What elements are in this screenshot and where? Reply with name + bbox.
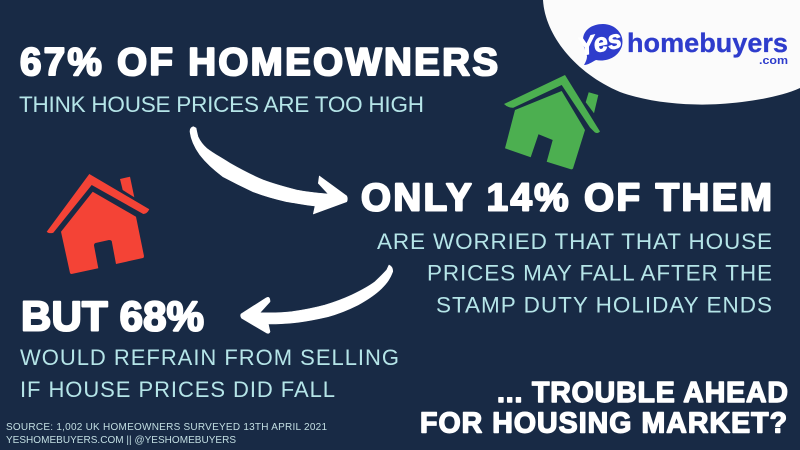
logo: yes homebuyers: Yes	[575, 23, 624, 62]
text: would refrain	[20, 345, 399, 402]
source note: YESHOMEBUYERS.COM || @YESHOMEBUYERS	[6, 435, 236, 446]
logo: yes homebuyers: homebuyers	[627, 28, 788, 58]
arrow: to 68%	[241, 265, 393, 333]
logo: yes homebuyers: .com	[759, 55, 788, 67]
heading: but 68%: BUT 68%	[21, 292, 204, 340]
icon: green house	[504, 75, 600, 169]
callout: trouble ahead	[420, 377, 788, 440]
callout: trouble ahead: ... TROUBLE AHEAD	[497, 377, 788, 409]
text: are worried: PRICES MAY FALL AFTER THE	[427, 260, 772, 286]
text: think house prices: THINK HOUSE PRICES ARE TOO HIGH	[19, 92, 424, 117]
logo panel: white ellipse	[543, 0, 800, 105]
text: are worried: STAMP DUTY HOLIDAY ENDS	[436, 292, 772, 318]
text: are worried	[377, 229, 772, 318]
logo: yes homebuyers	[575, 23, 788, 67]
text: are worried: ARE WORRIED THAT THAT HOUSE	[377, 229, 772, 254]
source note	[6, 422, 327, 446]
icon: red house	[47, 174, 149, 274]
arrow: to 14%	[190, 127, 347, 214]
heading: 67% of homeowners: 67% OF HOMEOWNERS	[20, 41, 498, 84]
text: would refrain: WOULD REFRAIN FROM SELLING	[20, 345, 399, 370]
callout: trouble ahead: FOR HOUSING MARKET?	[420, 408, 787, 440]
source note: SOURCE: 1,002 UK HOMEOWNERS SURVEYED 13TH APRIL 2021	[6, 422, 327, 433]
heading: only 14% of them: ONLY 14% OF THEM	[361, 176, 772, 220]
text: would refrain: IF HOUSE PRICES DID FALL	[20, 377, 335, 402]
